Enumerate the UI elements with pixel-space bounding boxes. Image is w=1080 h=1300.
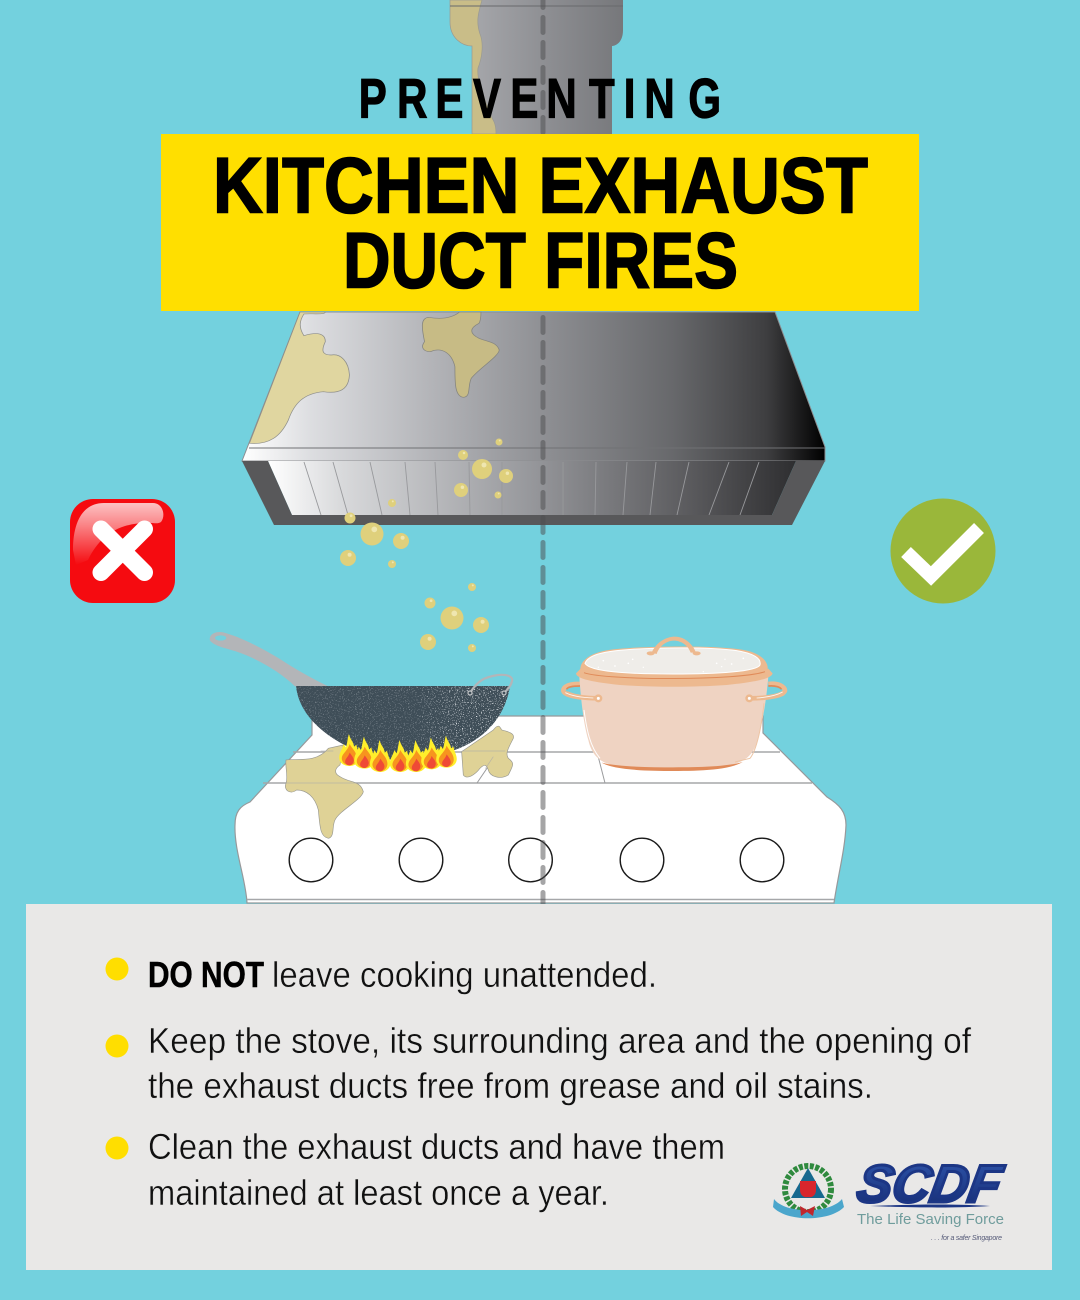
pot front handles bbox=[567, 693, 783, 698]
lid knob bbox=[652, 637, 696, 654]
icon: red cross bbox=[70, 499, 175, 603]
cooking pot bbox=[563, 637, 785, 771]
logo: SCDF wordmark: The Life Saving Force bbox=[857, 1211, 1004, 1228]
exhaust duct bbox=[450, 0, 623, 134]
tip three bbox=[148, 1126, 725, 1213]
tip three: Clean the exhaust ducts and have them bbox=[148, 1126, 725, 1167]
tip two: Keep the stove, its surrounding area and the opening of bbox=[148, 1020, 972, 1061]
flames bbox=[339, 734, 457, 772]
hood grease stains bbox=[249, 312, 499, 444]
wok handle bbox=[210, 632, 328, 686]
tip three: maintained at least once a year. bbox=[148, 1172, 609, 1213]
logo: SCDF wordmark: SCDF bbox=[853, 1155, 1008, 1214]
wok speckle bbox=[296, 686, 510, 758]
bullet one bbox=[106, 958, 128, 980]
logo: SCDF wordmark bbox=[853, 1155, 1008, 1242]
cross gloss bbox=[73, 503, 163, 565]
wok small handle bbox=[470, 675, 512, 693]
hood front frame bbox=[242, 461, 825, 525]
hood inner vents bbox=[268, 461, 796, 515]
cooker hood bbox=[242, 312, 825, 525]
heading: preventing: PREVENTING bbox=[359, 68, 721, 130]
cross mark bbox=[101, 529, 144, 572]
gas stove bbox=[235, 716, 846, 903]
wok with flames bbox=[210, 632, 520, 772]
tip one: DO NOT bbox=[148, 954, 264, 995]
logo: SCDF wordmark: . . . for a safer Singapore bbox=[931, 1235, 1002, 1242]
bullet two bbox=[106, 1034, 128, 1058]
icon: SCDF emblem bbox=[773, 1166, 844, 1218]
title banner bbox=[161, 134, 919, 311]
tip two bbox=[148, 1020, 972, 1106]
grease bubbles bbox=[340, 438, 513, 652]
title line one: KITCHEN EXHAUST bbox=[213, 140, 868, 230]
panel: safety tips bbox=[26, 904, 1052, 1270]
duct grease stain bbox=[450, 0, 496, 134]
stove knobs bbox=[289, 838, 784, 882]
tip two: the exhaust ducts free from grease and oil stains. bbox=[148, 1065, 873, 1106]
bullet three bbox=[106, 1136, 128, 1160]
pot side handles back bbox=[563, 684, 598, 698]
wok bowl bbox=[296, 686, 510, 760]
icon: green check bbox=[890, 498, 996, 604]
pot body bbox=[579, 677, 768, 768]
dashed centre divider bbox=[540, 0, 546, 904]
title line two: DUCT FIRES bbox=[343, 216, 738, 304]
stove grease stains bbox=[285, 726, 514, 838]
tip one: leave cooking unattended. bbox=[272, 954, 657, 995]
pot lid bbox=[580, 646, 768, 682]
